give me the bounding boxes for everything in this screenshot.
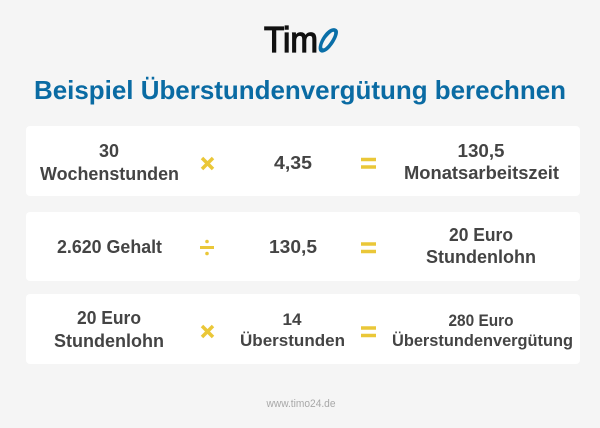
text: 130,5 Monatsarbeitszeit xyxy=(404,141,559,183)
text: 4,35: 4,35 xyxy=(274,153,312,173)
text: 20 Euro Stundenlohn xyxy=(426,225,536,267)
panel: row 1 xyxy=(26,126,580,196)
text: 280 Euro Überstundenvergütung: Überstundenvergütung xyxy=(392,331,573,350)
title: Beispiel Überstundenvergütung berechnen xyxy=(34,75,566,105)
text: 20 Euro Stundenlohn: Stundenlohn xyxy=(54,331,164,351)
text: 30 Wochenstunden: Wochenstunden xyxy=(40,164,179,184)
panel: row 3 xyxy=(26,294,580,364)
text: 280 Euro Überstundenvergütung xyxy=(392,312,573,350)
text: 280 Euro Überstundenvergütung: 280 Euro xyxy=(448,312,514,330)
text: 14 Überstunden xyxy=(240,311,345,350)
icon: equals xyxy=(361,160,376,167)
icon: divide xyxy=(200,240,214,255)
text: 30 Wochenstunden xyxy=(40,141,179,184)
icon: multiply xyxy=(202,326,213,337)
text: 20 Euro Stundenlohn: 20 Euro xyxy=(77,308,141,328)
text: 20 Euro Stundenlohn: 20 Euro xyxy=(449,225,513,245)
logo: Timo: Tim xyxy=(264,19,318,60)
text: 130,5 Monatsarbeitszeit: Monatsarbeitszeit xyxy=(404,163,559,183)
text: 30 Wochenstunden: 30 xyxy=(99,141,119,161)
text: 20 Euro Stundenlohn: Stundenlohn xyxy=(426,247,536,267)
icon: multiply xyxy=(202,158,213,169)
text: 20 Euro Stundenlohn xyxy=(54,308,164,351)
text: 130,5: 130,5 xyxy=(269,237,317,257)
footer url: www.timo24.de xyxy=(266,398,336,410)
text: 14 Überstunden: Überstunden xyxy=(240,331,345,350)
text: 2.620 Gehalt: 2.620 Gehalt xyxy=(57,237,162,257)
icon: equals xyxy=(361,328,376,336)
text: 14 Überstunden: 14 xyxy=(282,311,302,329)
panel: row 2 xyxy=(26,212,580,281)
icon: equals xyxy=(361,244,376,252)
text: 130,5 Monatsarbeitszeit: 130,5 xyxy=(458,141,504,161)
